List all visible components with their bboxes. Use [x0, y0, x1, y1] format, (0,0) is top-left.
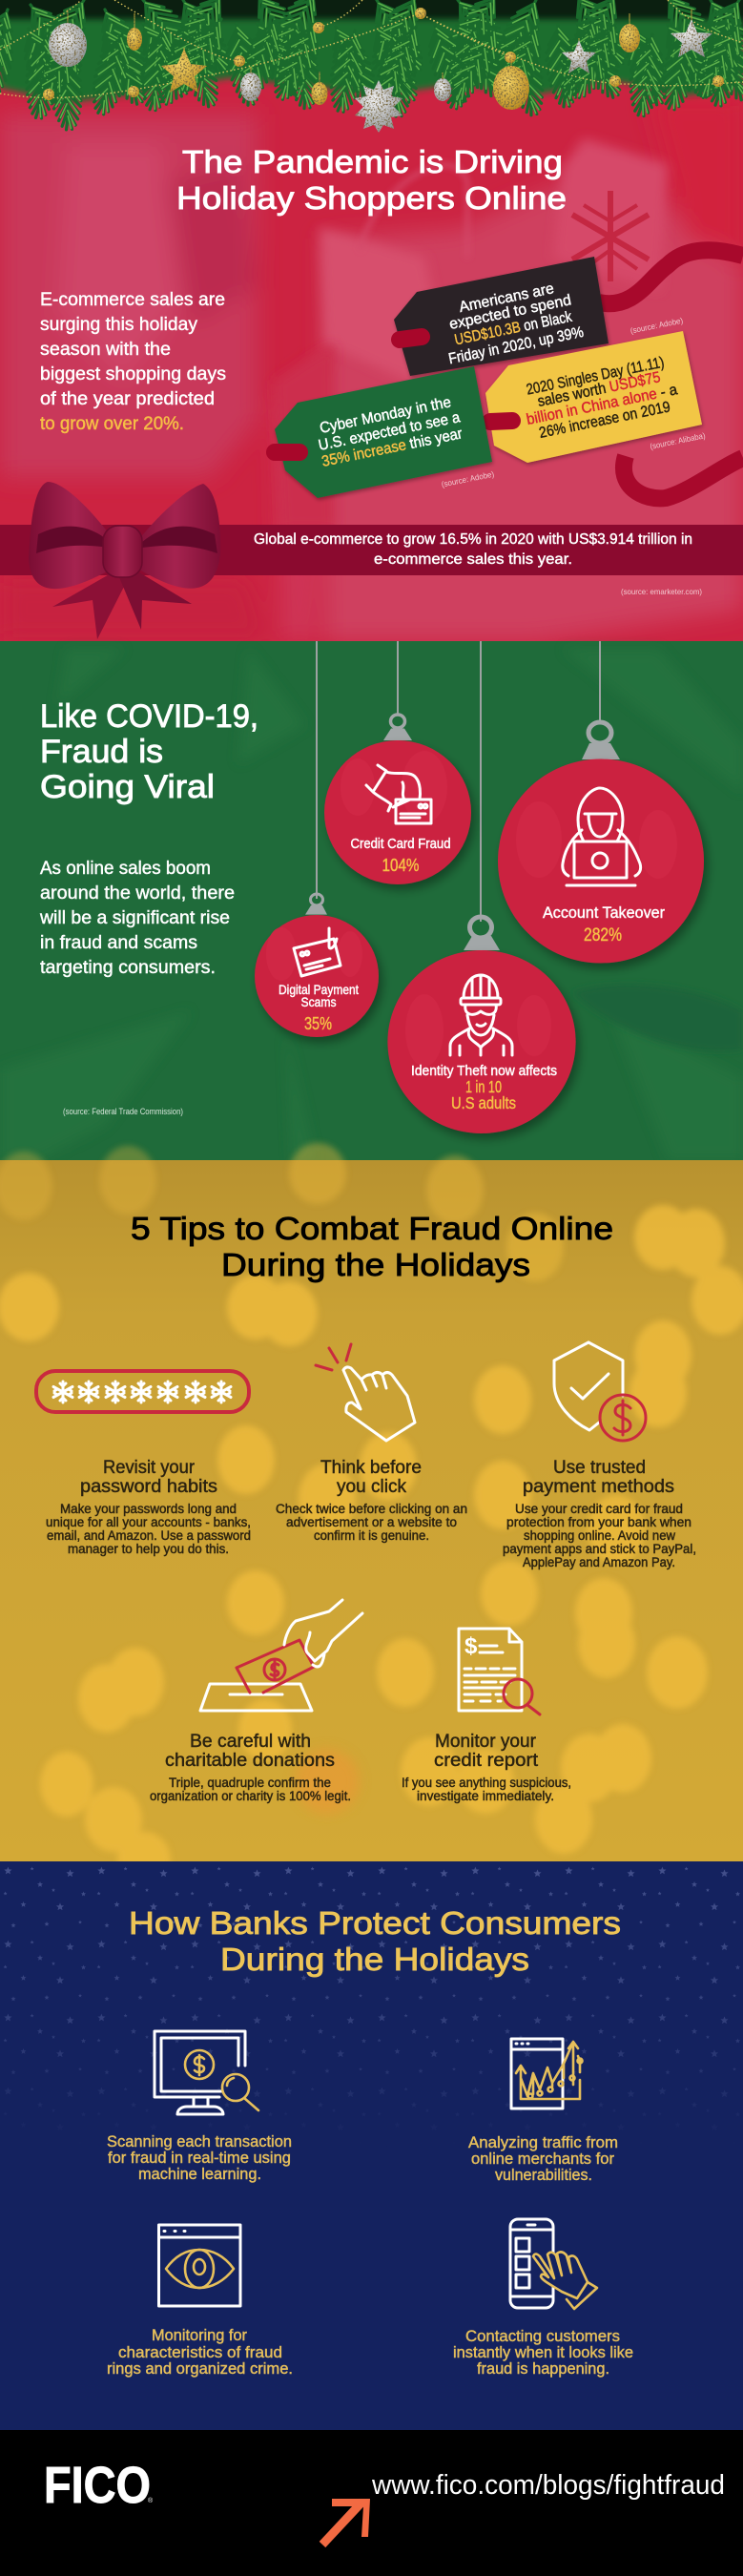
heading: [129, 1905, 621, 1977]
text: characteristics of fraud: [118, 2343, 282, 2361]
tip heading: Revisit your: [103, 1457, 195, 1478]
intro text: E-commerce sales are: [40, 289, 225, 310]
label: 1 in 10: [465, 1077, 502, 1096]
tip text: manager to help you do this.: [68, 1542, 229, 1556]
panel: how banks protect consumers: [0, 1861, 743, 2430]
FICO logo: FICO: [44, 2457, 151, 2514]
text: for fraud in real-time using: [108, 2149, 291, 2167]
background ribbon: [599, 250, 743, 498]
icon: masked thief: [450, 975, 512, 1055]
tag: Black Friday: [394, 257, 609, 376]
tag: Cyber Monday: 35% increase this year: [320, 426, 464, 470]
text: [107, 2326, 293, 2378]
intro text: to grow over 20%.: [40, 413, 184, 434]
bow: [29, 482, 220, 639]
text: [107, 2132, 292, 2183]
item: scanning: [107, 2031, 292, 2183]
tip heading: credit report: [434, 1750, 539, 1771]
icon: browser with chart: [511, 2039, 582, 2109]
heading: 5 Tips to Combat Fraud Online: [131, 1211, 613, 1246]
tip text: Check twice before clicking on an: [276, 1502, 467, 1516]
intro text: season with the: [40, 339, 171, 360]
tag sources: (source: Adobe): [629, 316, 684, 336]
tip text: investigate immediately.: [417, 1789, 554, 1803]
label: [279, 982, 359, 1033]
title: Holiday Shoppers Online: [176, 180, 567, 216]
label: Credit Card Fraud: [351, 837, 450, 852]
ornament: digital payment scams: [255, 894, 379, 1037]
tag: Black Friday: Americans are: [458, 280, 555, 316]
heading: Going Viral: [40, 769, 215, 805]
tag: Cyber Monday: [275, 366, 492, 498]
label: [543, 904, 665, 945]
tag sources: [441, 316, 706, 489]
icon: password field: [36, 1371, 249, 1412]
tip 3: payment: [503, 1342, 696, 1569]
text: rings and organized crime.: [107, 2359, 293, 2378]
body text: around the world, there: [40, 883, 235, 904]
background shopping bag: [275, 165, 467, 530]
label: Account Takeover: [543, 904, 665, 922]
intro text: [40, 289, 226, 434]
tag: Cyber Monday: U.S. expected to see a: [317, 409, 462, 454]
tag: Black Friday: USD$10.3B on Black: [453, 309, 574, 348]
FICO logo: ®: [148, 2497, 154, 2504]
item: monitoring: [107, 2225, 293, 2378]
text: [453, 2327, 633, 2378]
heading: During the Holidays: [221, 1247, 530, 1282]
garland: [0, 0, 743, 131]
tip heading: Be careful with: [190, 1731, 311, 1752]
heading: How Banks Protect Consumers: [129, 1905, 621, 1941]
ornament: credit card fraud: [324, 715, 471, 884]
tag sources: (source: Alibaba): [649, 430, 706, 451]
tag: Singles Day: sales worth USD$75: [536, 369, 662, 410]
text: Analyzing traffic from: [468, 2133, 618, 2151]
tip heading: charitable donations: [165, 1750, 335, 1771]
heading: Like COVID-19,: [40, 698, 258, 735]
text: instantly when it looks like: [453, 2343, 633, 2361]
tip text: Make your passwords long and: [60, 1502, 237, 1516]
tip heading: [434, 1731, 539, 1771]
tip heading: [80, 1457, 217, 1497]
body text: will be a significant rise: [39, 907, 230, 928]
tip 5: credit report: [402, 1629, 571, 1803]
tag: Singles Day: billion in China alone - a: [526, 382, 679, 428]
icon: pointing hand: [316, 1344, 415, 1441]
intro text: surging this holiday: [40, 314, 197, 335]
ornaments on garland: [43, 8, 724, 133]
website url: www.fico.com/blogs/fightfraud: [371, 2470, 725, 2501]
item: analyzing: [468, 2039, 618, 2184]
ornament: account takeover: [498, 722, 704, 964]
tag: Singles Day: [485, 331, 702, 463]
label: Digital Payment: [279, 982, 359, 997]
label: 282%: [584, 925, 622, 945]
tip text: email, and Amazon. Use a password: [47, 1528, 251, 1543]
tip 4: donations: [150, 1600, 362, 1803]
icon: hand holding card: [366, 765, 431, 823]
icon: browser with eye: [158, 2225, 240, 2306]
ornament: identity theft: [387, 917, 576, 1133]
icon: hooded hacker: [563, 788, 641, 885]
text: fraud is happening.: [477, 2359, 609, 2378]
tip text: [276, 1502, 467, 1543]
tag: Black Friday: Friday in 2020, up 39%: [447, 324, 585, 367]
tip text: shopping online. Avoid new: [524, 1528, 675, 1543]
band: global e-commerce: [0, 525, 743, 575]
icon: shield and coin: [554, 1342, 646, 1441]
tip text: Use your credit card for fraud: [515, 1502, 683, 1516]
text: Monitoring for: [152, 2326, 247, 2344]
text: online merchants for: [471, 2150, 614, 2168]
text: Contacting customers: [465, 2327, 620, 2345]
text: vulnerabilities.: [495, 2166, 592, 2184]
panel: holiday shoppers online: [0, 0, 743, 641]
tip text: If you see anything suspicious,: [402, 1776, 571, 1790]
tip heading: [320, 1457, 422, 1497]
tip heading: payment methods: [523, 1476, 674, 1497]
body text: [39, 858, 235, 978]
tip text: [150, 1776, 351, 1803]
band: global e-commerce: Global e-commerce to grow 16.5% in 2020 with US$3.914 trillion in: [254, 531, 692, 548]
tip heading: [523, 1457, 674, 1497]
tip text: [503, 1502, 696, 1569]
background gift tag with snowflake: [553, 138, 668, 291]
icon: document with magnifier: [459, 1629, 540, 1714]
icon: donation box: [200, 1600, 362, 1711]
tip text: [46, 1502, 251, 1556]
label: [411, 1064, 557, 1112]
icon: hooked card: [294, 928, 341, 976]
tag sources: (source: Adobe): [441, 469, 495, 489]
heading: [131, 1211, 613, 1282]
tip text: payment apps and stick to PayPal,: [503, 1542, 696, 1556]
band: global e-commerce: e-commerce sales this year.: [374, 551, 572, 568]
text: Scanning each transaction: [107, 2132, 292, 2150]
heading: [40, 698, 258, 805]
tip 2: click: [276, 1344, 467, 1543]
label: Scams: [301, 994, 336, 1009]
tip text: confirm it is genuine.: [314, 1528, 429, 1543]
label: U.S adults: [451, 1093, 516, 1112]
tip heading: password habits: [80, 1476, 217, 1497]
icon: document with magnifier: $: [464, 1633, 478, 1659]
tag: Singles Day: 2020 Singles Day (11.11): [525, 355, 666, 399]
tip text: unique for all your accounts - banks,: [46, 1515, 251, 1529]
strings: [317, 641, 600, 922]
label: [351, 837, 450, 875]
tip heading: Think before: [320, 1457, 422, 1478]
title: The Pandemic is Driving: [182, 144, 563, 179]
tip heading: you click: [337, 1476, 406, 1497]
tip 1: passwords: [36, 1371, 251, 1556]
icon: monitor with magnifier: [155, 2031, 258, 2114]
tip heading: Use trusted: [553, 1457, 646, 1478]
text: machine learning.: [138, 2165, 261, 2183]
label: 35%: [304, 1014, 332, 1033]
panel: footer: [0, 2430, 743, 2576]
tip text: ApplePay and Amazon Pay.: [523, 1555, 675, 1569]
source: (source: Federal Trade Commission): [63, 1107, 183, 1116]
tip text: protection from your bank when: [506, 1515, 691, 1529]
body text: in fraud and scams: [40, 932, 197, 953]
intro text: of the year predicted: [40, 388, 215, 409]
tag: Cyber Monday: Cyber Monday in the: [319, 394, 452, 437]
intro text: biggest shopping days: [40, 364, 226, 384]
item: contacting: [453, 2219, 633, 2378]
text: [468, 2133, 618, 2184]
heading: Fraud is: [40, 734, 163, 770]
tip text: [402, 1776, 571, 1803]
tip text: advertisement or a website to: [286, 1515, 457, 1529]
title: [176, 144, 567, 216]
tag: Singles Day: 26% increase on 2019: [538, 399, 671, 442]
body text: targeting consumers.: [40, 957, 216, 978]
body text: As online sales boom: [40, 858, 211, 879]
tag: Black Friday: expected to spend: [448, 292, 572, 333]
label: 104%: [382, 856, 420, 875]
source: emarketer: (source: emarketer.com): [621, 587, 702, 596]
tip heading: [165, 1731, 335, 1771]
tip heading: Monitor your: [435, 1731, 536, 1752]
arrow: [322, 2499, 370, 2545]
panel: fraud is going viral: [0, 641, 743, 1160]
tip text: Triple, quadruple confirm the: [169, 1776, 331, 1790]
panel: 5 tips: [0, 1143, 743, 1889]
heading: During the Holidays: [220, 1942, 529, 1977]
label: Identity Theft now affects: [411, 1064, 557, 1079]
tip text: organization or charity is 100% legit.: [150, 1789, 351, 1803]
icon: phone and hand: [510, 2219, 597, 2309]
